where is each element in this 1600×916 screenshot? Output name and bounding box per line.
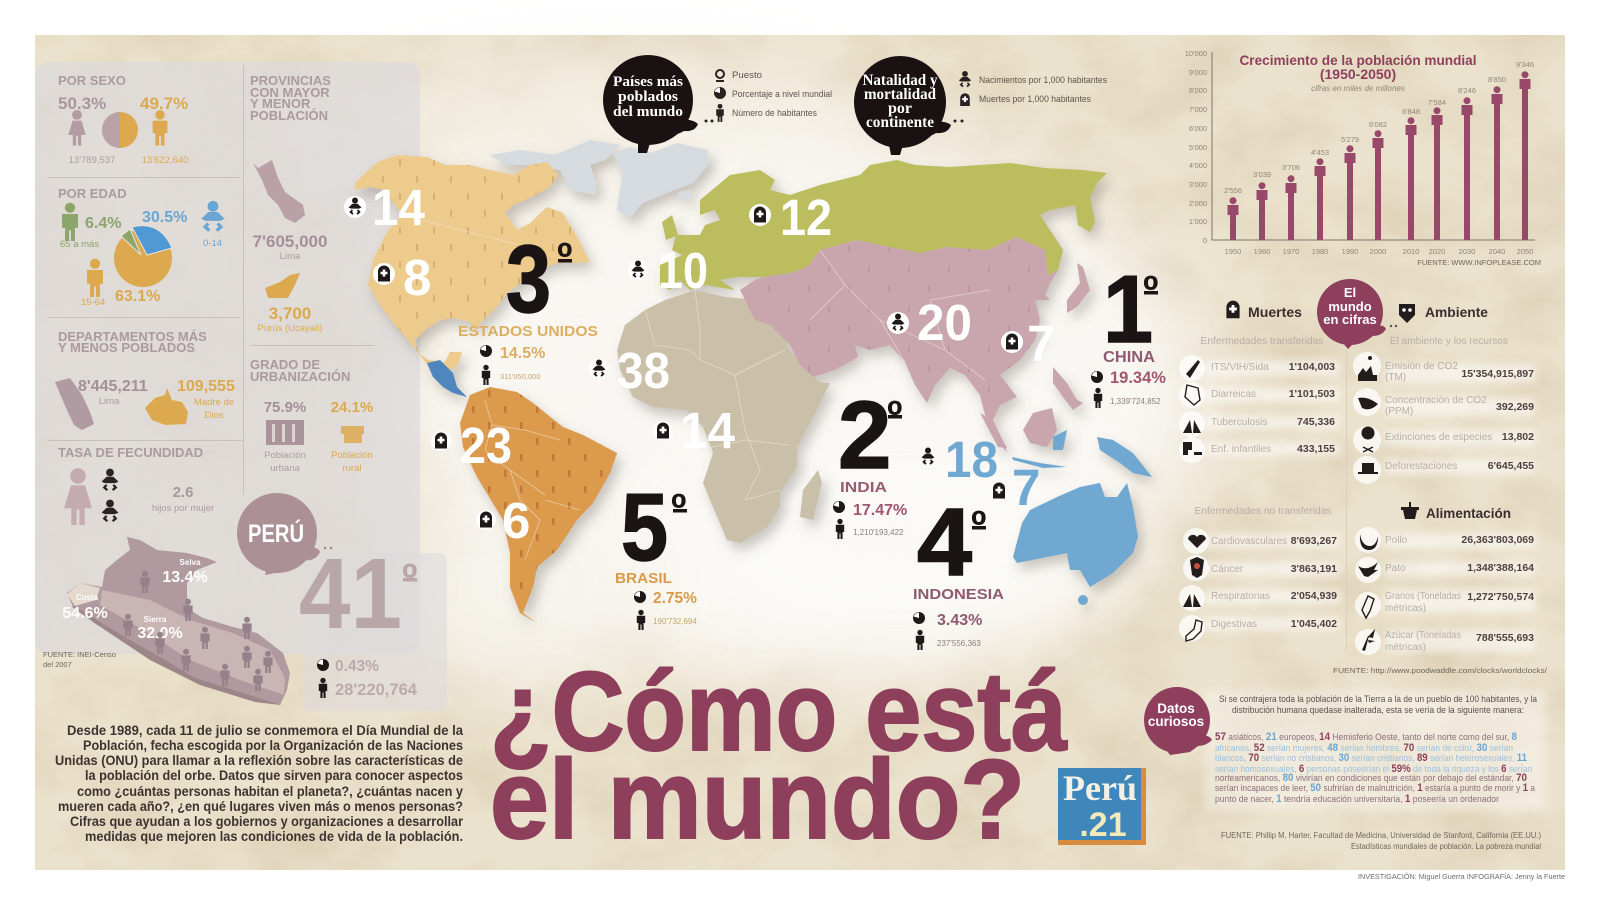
icon discs — [1179, 352, 1381, 655]
section: provincias: 7'605,000 — [253, 232, 327, 251]
Iceland — [678, 190, 692, 200]
section: por sexo: 13'622,640 — [142, 155, 188, 166]
axes: 2000 — [1370, 247, 1386, 256]
rank: Indonesia: º — [971, 502, 986, 549]
bar values: 3'039 — [1253, 170, 1271, 179]
section: provincias: CON MAYOR — [250, 85, 330, 100]
section: alimentacion: 788'555,693 — [1476, 632, 1534, 644]
facts: serían incapaces de leer, 50 sufrirían de malnutrición, 1 estaría a punto de morir y 1 a — [1215, 782, 1536, 794]
section: urbanizacion: Población — [331, 450, 373, 461]
legend items: Número de habitantes — [732, 108, 817, 119]
Greenland — [613, 143, 710, 218]
section: alimentacion — [1358, 502, 1534, 653]
section: tasa de fecundidad: TASA DE FECUNDIDAD — [58, 445, 203, 460]
intro paragraph: Población, fecha escogida por la Organización de las Naciones — [83, 738, 463, 754]
section: departamentos — [55, 329, 235, 430]
section: ambiente: 392,269 — [1496, 401, 1534, 413]
section: ambiente: 15'354,915,897 — [1461, 368, 1534, 380]
section: por sexo: 13'789,537 — [69, 155, 115, 166]
section: por edad: 30.5% — [142, 209, 187, 226]
section: alimentacion: 26,363'803,069 — [1461, 534, 1534, 546]
chart title: cifras en miles de millones — [1311, 84, 1405, 93]
legend items: Porcentaje a nivel mundial — [732, 89, 832, 100]
New Guinea — [1097, 437, 1152, 477]
section: provincias: 3,700 — [269, 304, 311, 323]
rank: India: º — [887, 392, 902, 439]
bubble: continente — [866, 114, 934, 131]
panel: datos curiosos — [1144, 687, 1545, 851]
section: ambiente: Deforestaciones — [1385, 461, 1457, 472]
bar values: 5'279 — [1341, 135, 1359, 144]
axes: 2'000 — [1189, 199, 1207, 208]
rank: India: INDIA — [840, 479, 887, 496]
section: departamentos: 109,555 — [177, 378, 235, 395]
environment icons — [1358, 356, 1378, 474]
axes: 2040 — [1489, 247, 1505, 256]
rank: Peru: 28'220,764 — [335, 681, 418, 699]
North America — [355, 155, 590, 372]
rank: Estados Unidos — [458, 226, 598, 385]
section: urbanizacion — [250, 357, 373, 474]
axes: 2020 — [1429, 247, 1445, 256]
section: alimentacion: 1,348'388,164 — [1467, 562, 1534, 574]
section: provincias: Y MENOR — [250, 96, 311, 111]
section: ambiente: 6'645,455 — [1488, 460, 1534, 472]
axes: 1'000 — [1189, 217, 1207, 226]
Australia — [1013, 483, 1138, 587]
Arctic Canada — [490, 140, 620, 195]
bar values: 3'706 — [1282, 163, 1300, 172]
bar values: 2'556 — [1224, 186, 1242, 195]
section: muertes: 1'104,003 — [1289, 361, 1335, 373]
facts — [1215, 731, 1536, 805]
chart title: Crecimiento de la población mundial — [1240, 52, 1476, 68]
rank: India: 1,210'193,422 — [853, 528, 904, 537]
source note: del 2007 — [43, 660, 72, 669]
chart title: (1950-2050) — [1320, 66, 1396, 82]
section: por sexo: POR SEXO — [58, 73, 126, 88]
source: FUENTE: http://www.poodwaddle.com/clocks/worldclocks/ — [1333, 666, 1548, 675]
bubble: Datos — [1157, 701, 1195, 716]
rank: Brasil: 190'732,694 — [653, 617, 697, 626]
intro text: Si se contrajera toda la población de la Tierra a la de un pueblo de 100 habitantes, y la — [1219, 694, 1538, 705]
section: ambiente: (PPM) — [1385, 406, 1413, 417]
intro paragraph: mueren cada año?, ¿en qué lugares viven más o menos personas? — [58, 799, 463, 815]
Japan — [1067, 263, 1090, 313]
section: muertes: Muertes — [1248, 304, 1302, 320]
bubble: poblados — [618, 89, 678, 105]
axes: 10'000 — [1185, 49, 1207, 58]
section: alimentacion: Granos (Toneladas — [1385, 591, 1461, 602]
section: muertes: Enfermedades no transferidas — [1194, 506, 1332, 517]
intro paragraph: Unidas (ONU) para llamar a la reflexión sobre las características de — [55, 753, 463, 769]
map birth and death figures: 7 — [1012, 459, 1040, 516]
Madagascar — [800, 470, 822, 520]
map birth and death figures: 38 — [617, 342, 670, 399]
map birth and death figures: 23 — [460, 417, 512, 474]
bubble: curiosos — [1148, 714, 1204, 729]
bar values: 8'850 — [1488, 75, 1506, 84]
logo: Peru.21 — [1058, 768, 1146, 845]
legend: paises mas poblados — [603, 55, 832, 153]
facts: punto de nacer, 1 tendría educación universitaria, 1 poseería un ordenador — [1215, 793, 1499, 805]
rank: Peru: 41 — [299, 538, 402, 650]
region labels: 54.6% — [62, 605, 108, 622]
axes: 1960 — [1254, 247, 1270, 256]
bubble: del mundo — [613, 104, 683, 120]
section: alimentacion: Alimentación — [1426, 505, 1511, 521]
region labels: Selva — [180, 558, 201, 567]
Borneo — [1023, 408, 1057, 447]
rank: Brasil — [615, 474, 697, 630]
section: muertes: Tuberculosis — [1211, 417, 1267, 428]
section: ambiente — [1358, 304, 1534, 474]
section: tasa de fecundidad — [58, 445, 214, 525]
rank: Indonesia: 237'556,363 — [937, 639, 981, 648]
axes: 4'000 — [1189, 161, 1207, 170]
map birth and death figures: 6 — [502, 492, 530, 549]
facts: norteamericanos, 80 vivirían en condiciones que están por debajo del estándar, 70 — [1215, 772, 1527, 784]
section: departamentos: DEPARTAMENTOS MÁS — [58, 329, 207, 344]
panel: Peru statistics — [35, 62, 447, 711]
rank: China — [1091, 256, 1166, 408]
section: por edad: 0-14 — [203, 238, 222, 249]
region labels: Costa — [76, 593, 99, 602]
section: por edad: 6.4% — [85, 215, 121, 232]
bubble: mundo — [1328, 299, 1372, 314]
section: muertes: 3'863,191 — [1291, 563, 1337, 575]
bubble: PERÚ — [248, 518, 304, 548]
section: alimentacion: Pato — [1385, 563, 1406, 574]
source — [1221, 831, 1541, 851]
rank: Indonesia: INDONESIA — [913, 586, 1004, 603]
strips — [1205, 360, 1535, 652]
axes: 8'000 — [1189, 86, 1207, 95]
rank: Brasil: 5 — [621, 474, 668, 581]
section: urbanizacion: 24.1% — [331, 399, 373, 416]
source: Estadísticas mundiales de población. La pobreza mundial — [1351, 842, 1541, 851]
section: muertes: 2'054,939 — [1291, 590, 1337, 602]
section: departamentos: Lima — [99, 396, 120, 407]
section: ambiente: El ambiente y los recursos — [1390, 336, 1508, 347]
section: por edad — [58, 186, 225, 308]
axes: 9'000 — [1189, 68, 1207, 77]
intro paragraph: Desde 1989, cada 11 de julio se conmemora el Día Mundial de la — [67, 723, 463, 739]
section: ambiente: Emisión de CO2 — [1385, 361, 1458, 372]
map birth and death figures: 14 — [680, 402, 736, 459]
axes: 7'000 — [1189, 105, 1207, 114]
section: muertes: 1'045,402 — [1291, 618, 1337, 630]
rank: Estados Unidos: º — [557, 234, 572, 281]
bubble: mortalidad — [864, 86, 936, 103]
axes: 0 — [1203, 236, 1207, 245]
Africa — [617, 290, 830, 543]
rank: Indonesia: 4 — [917, 489, 972, 596]
map birth and death figures — [344, 179, 1055, 549]
intro paragraph: medidas que mejoren las condiciones de vida de la población. — [85, 829, 463, 845]
section: urbanizacion: Población — [264, 450, 306, 461]
axes: 1990 — [1342, 247, 1358, 256]
bars — [1228, 71, 1530, 240]
axes: 2010 — [1403, 247, 1419, 256]
intro paragraph — [55, 723, 463, 845]
facts: serían homosexuales, 6 personas poseerían el 59% de toda la riqueza y los 6 serían — [1215, 763, 1532, 775]
section: ambiente: Extinciones de especies — [1385, 432, 1492, 443]
country borders — [402, 215, 990, 560]
map birth and death figures: 8 — [403, 249, 431, 306]
section: alimentacion: métricas) — [1385, 642, 1426, 653]
panel: el mundo en cifras — [1179, 279, 1548, 675]
legend items: Puesto — [732, 70, 762, 81]
bubble: Países más — [613, 74, 683, 90]
rank: India: 17.47% — [853, 502, 907, 519]
region labels: 13.4% — [162, 569, 208, 586]
section: urbanizacion: 75.9% — [264, 399, 306, 416]
section: por sexo — [58, 73, 188, 166]
section: muertes: ITS/VIH/Sida — [1211, 362, 1269, 373]
rank: China: 19.34% — [1110, 369, 1166, 387]
Sulawesi — [1053, 430, 1067, 450]
section: urbanizacion: urbana — [270, 463, 301, 474]
bar values: 9'346 — [1516, 60, 1534, 69]
section: tasa de fecundidad: hijos por mujer — [152, 503, 214, 514]
credits: INVESTIGACIÓN: Miguel Guerra INFOGRAFÍA: Jenny la Fuerte — [1358, 872, 1565, 881]
axes: 6'000 — [1189, 124, 1207, 133]
legend: natalidad y mortalidad — [854, 56, 1107, 155]
axes — [1185, 49, 1535, 256]
section: departamentos: 8'445,211 — [78, 378, 148, 395]
facts: blancos, 70 serían no cristianos, 30 serían cristianos, 89 serían heterosexuales, 11 — [1215, 752, 1527, 764]
legend items: Muertes por 1,000 habitantes — [979, 94, 1091, 105]
legend items — [959, 71, 1107, 106]
South America — [460, 387, 617, 623]
section: departamentos: Madre de — [194, 397, 234, 408]
section: tasa de fecundidad: 2.6 — [173, 484, 193, 501]
chart source: FUENTE: WWW.INFOPLEASE.COM — [1417, 258, 1541, 267]
section: provincias: PROVINCIAS — [250, 73, 331, 88]
axes: 1980 — [1312, 247, 1328, 256]
bubble — [603, 55, 714, 153]
section: por edad: POR EDAD — [58, 186, 127, 201]
rank: Brasil: BRASIL — [615, 570, 672, 587]
logo: Peru.21: .21 — [1079, 806, 1127, 844]
UK — [662, 215, 678, 240]
source: FUENTE: Phillip M. Harter, Facultad de Medicina, Universidad de Stanford, California (EE.UU.) — [1221, 831, 1541, 840]
rank: China: 1,339'724,852 — [1110, 397, 1161, 406]
facts: africanos, 52 serían mujeres, 48 serían hombres, 70 serían de color, 30 serían — [1215, 742, 1513, 754]
intro paragraph: Cifras que ayudan a los gobiernos y organizaciones a desarrollar — [70, 814, 463, 830]
Sumatra — [980, 413, 1007, 448]
rank: Estados Unidos: ESTADOS UNIDOS — [458, 323, 598, 340]
section: alimentacion: Pollo — [1385, 535, 1408, 546]
region labels: Sierra — [144, 615, 167, 624]
section: muertes — [1183, 301, 1337, 641]
bar values: 6'848 — [1402, 107, 1420, 116]
bubble: Natalidad y — [862, 72, 938, 89]
intro paragraph: como ¿cuántas personas habitan el planeta?, ¿cuántas nacen y — [77, 784, 463, 800]
section: urbanizacion: URBANIZACIÓN — [250, 369, 350, 384]
Tasmania — [1078, 595, 1088, 605]
Philippines — [1053, 367, 1083, 410]
chart: world population growth — [1185, 49, 1541, 267]
section: muertes: Enf. infantiles — [1211, 444, 1271, 455]
panel background — [35, 62, 420, 654]
section: muertes: 8'693,267 — [1291, 535, 1337, 547]
rank: China: 1 — [1103, 256, 1153, 363]
facts: 57 asiáticos, 21 europeos, 14 Hemisferio Oeste, tanto del norte como del sur, 8 — [1215, 731, 1517, 743]
section: muertes: Digestivas — [1211, 619, 1257, 630]
intro paragraph: la población del orbe. Datos que sirven para conocer aspectos — [85, 768, 463, 784]
legend items — [714, 70, 832, 122]
section: urbanizacion: rural — [342, 463, 362, 474]
axes: 1970 — [1283, 247, 1299, 256]
bar values: 8'246 — [1458, 86, 1476, 95]
rank: Brasil: º — [671, 485, 686, 532]
map birth and death figures: 14 — [372, 179, 426, 236]
section: por edad: 15-64 — [81, 297, 105, 308]
Java — [1012, 457, 1067, 468]
section: alimentacion: 1,272'750,574 — [1467, 591, 1534, 603]
section: provincias — [250, 73, 331, 334]
section: ambiente: Ambiente — [1425, 304, 1488, 320]
source note — [43, 650, 116, 669]
section: departamentos: Y MENOS POBLADOS — [58, 340, 195, 355]
world map — [355, 140, 1152, 623]
axes: 3'000 — [1189, 180, 1207, 189]
map birth and death figures: 20 — [917, 294, 972, 351]
rank: Estados Unidos: 14.5% — [500, 345, 545, 362]
section: por sexo: 49.7% — [140, 94, 188, 113]
bubble: por — [888, 100, 912, 117]
intro text — [1219, 694, 1538, 716]
bar values: 6'082 — [1369, 120, 1387, 129]
section: ambiente: (TM) — [1385, 372, 1406, 383]
map birth and death figures: 10 — [658, 242, 708, 299]
rank: India: 2 — [838, 382, 891, 489]
bubble — [1317, 279, 1397, 349]
chart title — [1240, 52, 1476, 93]
bar values — [1224, 60, 1534, 195]
axes: 2030 — [1459, 247, 1475, 256]
rank: Peru: 0.43% — [335, 658, 379, 675]
axes: 1950 — [1225, 247, 1241, 256]
axes: 5'000 — [1189, 143, 1207, 152]
section: ambiente: Concentración de CO2 — [1385, 395, 1487, 406]
section: provincias: Purús (Ucayali) — [258, 323, 322, 334]
section: por sexo: 50.3% — [58, 94, 106, 113]
title: el mundo? — [490, 737, 1025, 862]
map birth and death figures: 12 — [780, 189, 832, 246]
section: muertes: Cardiovasculares — [1211, 536, 1287, 547]
bubble: El — [1344, 285, 1356, 300]
section: provincias: POBLACIÓN — [250, 108, 328, 123]
source note: FUENTE: INEI-Censo — [43, 650, 116, 659]
section: urbanizacion: GRADO DE — [250, 357, 320, 372]
disease icons — [1183, 360, 1206, 641]
logo: Peru.21: Perú — [1063, 768, 1137, 808]
rank: Brasil: 2.75% — [653, 590, 697, 607]
bubble — [237, 493, 332, 575]
Asia — [740, 237, 1058, 452]
title: ¿Cómo está — [490, 649, 1068, 774]
section: muertes: Enfermedades transferidas — [1200, 336, 1324, 347]
region labels: 32.0% — [137, 625, 183, 642]
bubble — [1144, 687, 1212, 755]
rank: Estados Unidos: 311'050,000 — [500, 372, 540, 381]
Europe and Russia — [660, 160, 1107, 290]
section: muertes: 433,155 — [1297, 443, 1335, 455]
section: provincias: Lima — [280, 251, 301, 262]
bar values: 4'453 — [1311, 148, 1329, 157]
bar values: 7'584 — [1428, 98, 1446, 107]
section: departamentos: Dios — [204, 410, 224, 421]
food icons — [1358, 534, 1378, 651]
section: muertes: Respiratorias — [1211, 591, 1270, 602]
section: alimentacion: Azúcar (Toneladas — [1385, 630, 1461, 641]
intro text: distribución humana quedase inalterada, esta se vería de la siguiente manera: — [1232, 705, 1524, 716]
rank: Peru — [237, 493, 418, 699]
section: alimentacion: métricas) — [1385, 603, 1426, 614]
section: muertes: Cáncer — [1211, 564, 1244, 575]
title — [490, 649, 1068, 862]
bubble — [854, 56, 964, 155]
section: muertes: 745,336 — [1297, 416, 1335, 428]
region labels — [62, 558, 208, 642]
rank: Indonesia — [913, 489, 1004, 650]
section: por edad: 65 a más — [60, 239, 99, 250]
legend items: Nacimientos por 1,000 habitantes — [979, 75, 1107, 86]
Central America — [427, 360, 467, 397]
section: muertes: 1'101,503 — [1289, 388, 1335, 400]
rank: China: º — [1143, 267, 1158, 314]
rank: Estados Unidos: 3 — [506, 226, 551, 333]
rank: Peru: º — [402, 555, 417, 602]
map of Peru regions — [62, 537, 290, 705]
section: por edad: 63.1% — [115, 288, 160, 305]
rank: India — [833, 382, 907, 539]
rank: Indonesia: 3.43% — [937, 612, 982, 629]
bubble: en cifras — [1323, 312, 1377, 327]
axes: 2050 — [1517, 247, 1533, 256]
section: muertes: Diarreicas — [1211, 389, 1256, 400]
map birth and death figures: 7 — [1027, 315, 1055, 372]
section: ambiente: 13,802 — [1502, 431, 1534, 443]
map birth and death figures: 18 — [945, 431, 998, 488]
rank: China: CHINA — [1103, 349, 1155, 366]
